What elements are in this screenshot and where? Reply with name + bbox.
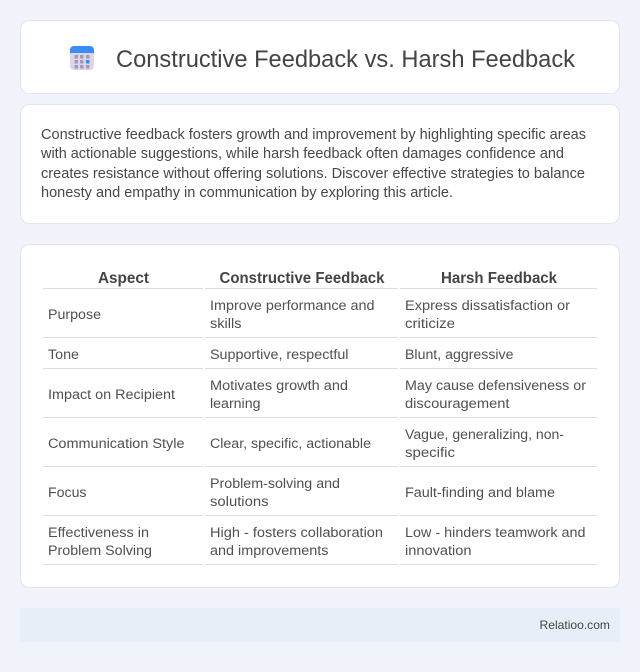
row: tone: Blunt, aggressive xyxy=(405,347,514,363)
row: effectiveness in problem solving: innovation xyxy=(405,543,472,559)
row: communication style: specific xyxy=(405,445,455,461)
row: purpose: Express dissatisfaction or xyxy=(405,298,570,314)
row: focus: Fault-finding and blame xyxy=(405,485,555,501)
row: tone: Supportive, respectful xyxy=(210,347,348,363)
table header row: Harsh Feedback xyxy=(441,270,557,287)
text block: introduction: creates resistance without offering solutions. Discover effective strategies to balance xyxy=(41,166,585,182)
row: impact on recipient: Impact on Recipient xyxy=(48,387,175,403)
row: focus: Focus xyxy=(48,485,86,501)
row: effectiveness in problem solving xyxy=(48,525,586,559)
row: communication style: Clear, specific, actionable xyxy=(210,436,371,452)
row: impact on recipient: learning xyxy=(210,396,260,412)
row: tone: Tone xyxy=(48,347,79,363)
row: purpose: Purpose xyxy=(48,307,101,323)
row: focus xyxy=(48,476,555,510)
row: purpose: skills xyxy=(210,316,242,332)
row: focus: Problem-solving and xyxy=(210,476,340,492)
table header row: Aspect xyxy=(98,270,149,287)
row: focus: solutions xyxy=(210,494,268,510)
row: impact on recipient: discouragement xyxy=(405,396,510,412)
footer credit: Relatioo.com xyxy=(540,618,610,632)
row: communication style: Communication Style xyxy=(48,436,185,452)
row: purpose: criticize xyxy=(405,316,455,332)
text block: introduction xyxy=(40,127,586,201)
icon: calendar xyxy=(70,46,94,70)
row: tone xyxy=(48,347,514,363)
row: purpose: Improve performance and xyxy=(210,298,374,314)
row: effectiveness in problem solving: Low - hinders teamwork and xyxy=(405,525,586,541)
row: purpose xyxy=(48,298,570,332)
text block: introduction: with actionable suggestions, while harsh feedback often damages confidence and xyxy=(40,146,564,162)
table header row: Constructive Feedback xyxy=(220,270,385,287)
table header row xyxy=(98,270,557,287)
text block: introduction: Constructive feedback fosters growth and improvement by highlighting specific areas xyxy=(41,127,586,143)
row: effectiveness in problem solving: High - fosters collaboration xyxy=(210,525,383,541)
row: effectiveness in problem solving: Problem Solving xyxy=(48,543,152,559)
title: Constructive Feedback vs. Harsh Feedback xyxy=(116,46,576,73)
footer xyxy=(20,608,620,642)
row: communication style: Vague, generalizing, non- xyxy=(405,427,564,443)
panel: introduction xyxy=(20,104,620,224)
panel: comparison table xyxy=(20,244,620,588)
row: effectiveness in problem solving: Effectiveness in xyxy=(48,525,149,541)
row: impact on recipient xyxy=(48,378,586,412)
row: impact on recipient: May cause defensiveness or xyxy=(405,378,586,394)
row: effectiveness in problem solving: and improvements xyxy=(210,543,328,559)
row: impact on recipient: Motivates growth and xyxy=(210,378,348,394)
panel: title header xyxy=(20,20,620,94)
row: communication style xyxy=(48,427,564,461)
text block: introduction: honesty and empathy in communication by exploring this article. xyxy=(41,185,453,201)
